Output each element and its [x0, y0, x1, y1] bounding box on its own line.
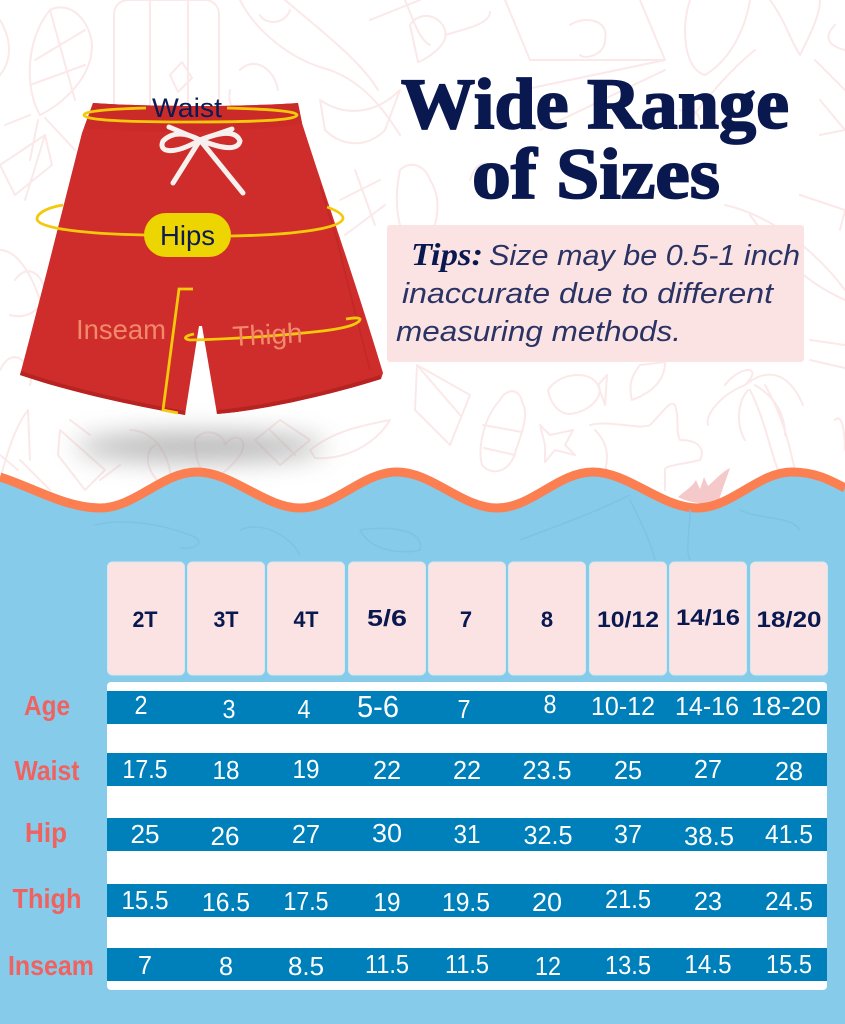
waist measure line — [84, 108, 297, 122]
label: thigh: Thigh — [232, 317, 303, 352]
inseam row values: 11.5 — [445, 949, 489, 979]
tips callout — [387, 225, 804, 362]
size header row: 14/16 — [676, 605, 740, 630]
hip row values: 30 — [372, 818, 402, 848]
inseam row values: 14.5 — [684, 949, 732, 979]
tips callout: inaccurate due to different — [402, 278, 775, 310]
label: hips: Hips — [160, 220, 215, 251]
age row values: 18-20 — [751, 691, 821, 721]
waist row values: 28 — [775, 756, 803, 786]
inseam row values: 15.5 — [766, 949, 812, 979]
size header row: 5/6 — [367, 605, 407, 631]
thigh row values — [122, 884, 813, 917]
row labels: Age — [24, 690, 70, 721]
background doodle pattern — [0, 0, 845, 490]
label: waist: Waist — [152, 93, 223, 123]
age row values: 3 — [222, 694, 236, 724]
waistband — [84, 103, 302, 132]
thigh row values: 19.5 — [442, 887, 490, 917]
age row values: 7 — [458, 694, 470, 724]
waist row values: 25 — [614, 755, 642, 785]
size header row: 2T — [132, 607, 158, 632]
inseam row values: 11.5 — [365, 949, 409, 979]
thigh row values: 16.5 — [202, 887, 250, 917]
shorts product with measure lines — [20, 93, 383, 415]
age row values: 10-12 — [591, 691, 655, 721]
size header row: 7 — [460, 607, 472, 632]
row bars — [107, 691, 827, 981]
title: of Sizes — [472, 134, 720, 214]
drawstring bow — [162, 127, 243, 193]
age row values: 5-6 — [357, 689, 399, 724]
age row values: 4 — [298, 694, 310, 724]
tips callout: Tips: — [411, 236, 483, 272]
age row values — [134, 689, 821, 724]
row labels: Waist — [14, 755, 80, 786]
title: Wide Range — [401, 64, 789, 144]
age row values: 8 — [544, 689, 556, 719]
age row values: 2 — [134, 690, 148, 720]
waist row values: 19 — [292, 754, 320, 784]
inseam row values — [138, 949, 812, 981]
inseam row values: 7 — [138, 950, 152, 980]
thigh row values: 15.5 — [122, 885, 168, 915]
inseam row values: 8.5 — [288, 951, 324, 981]
shorts ground shadow — [75, 433, 325, 461]
age row values: 14-16 — [675, 691, 739, 721]
hip row values: 31 — [454, 819, 480, 849]
hip row values: 26 — [210, 821, 240, 851]
waist row values: 22 — [453, 755, 481, 785]
waist row values — [122, 754, 803, 786]
waist row values: 18 — [212, 755, 240, 785]
shorts body — [20, 103, 383, 415]
thigh row values: 24.5 — [765, 886, 813, 916]
size header row — [108, 562, 828, 675]
label: inseam: Inseam — [76, 314, 166, 345]
row labels: Inseam — [8, 950, 94, 981]
thigh row values: 23 — [694, 886, 722, 916]
faint doodles on blue — [95, 495, 800, 560]
hip row values: 41.5 — [765, 819, 813, 849]
size header row: 18/20 — [756, 607, 822, 632]
thigh row values: 21.5 — [605, 884, 651, 914]
waist row values: 27 — [694, 754, 722, 784]
hip row values: 27 — [292, 819, 320, 849]
thigh row values: 17.5 — [284, 886, 328, 916]
row labels — [8, 690, 94, 981]
hip row values: 32.5 — [524, 820, 572, 850]
table panel — [107, 682, 827, 990]
pink palm leaf behind wave — [678, 468, 730, 504]
title — [401, 64, 789, 214]
hip row values — [130, 818, 813, 851]
waist row values: 22 — [373, 755, 401, 785]
inseam row values: 8 — [219, 951, 233, 981]
row labels: Hip — [25, 817, 67, 848]
blue lower section with wave edge — [0, 468, 845, 1024]
hip row values: 38.5 — [684, 821, 734, 851]
inseam row values: 12 — [535, 951, 561, 981]
size header row: 8 — [541, 607, 553, 632]
size header row: 10/12 — [597, 607, 659, 632]
tips callout: Size may be 0.5-1 inch — [489, 240, 800, 272]
waist row values: 23.5 — [522, 755, 572, 785]
tips callout: measuring methods. — [396, 316, 681, 348]
thigh row values: 20 — [532, 887, 562, 917]
size header row: 4T — [294, 607, 319, 632]
waist row values: 17.5 — [122, 754, 168, 784]
size header row: 3T — [214, 607, 239, 632]
thigh row values: 19 — [374, 887, 400, 917]
inseam measure line — [163, 289, 193, 413]
thigh measure line — [185, 318, 360, 340]
label: hips — [144, 213, 231, 257]
hips measure line — [37, 205, 343, 236]
size table — [8, 682, 827, 990]
hip row values: 25 — [130, 819, 160, 849]
row labels: Thigh — [12, 883, 82, 914]
hip row values: 37 — [614, 819, 642, 849]
inseam row values: 13.5 — [605, 950, 651, 980]
